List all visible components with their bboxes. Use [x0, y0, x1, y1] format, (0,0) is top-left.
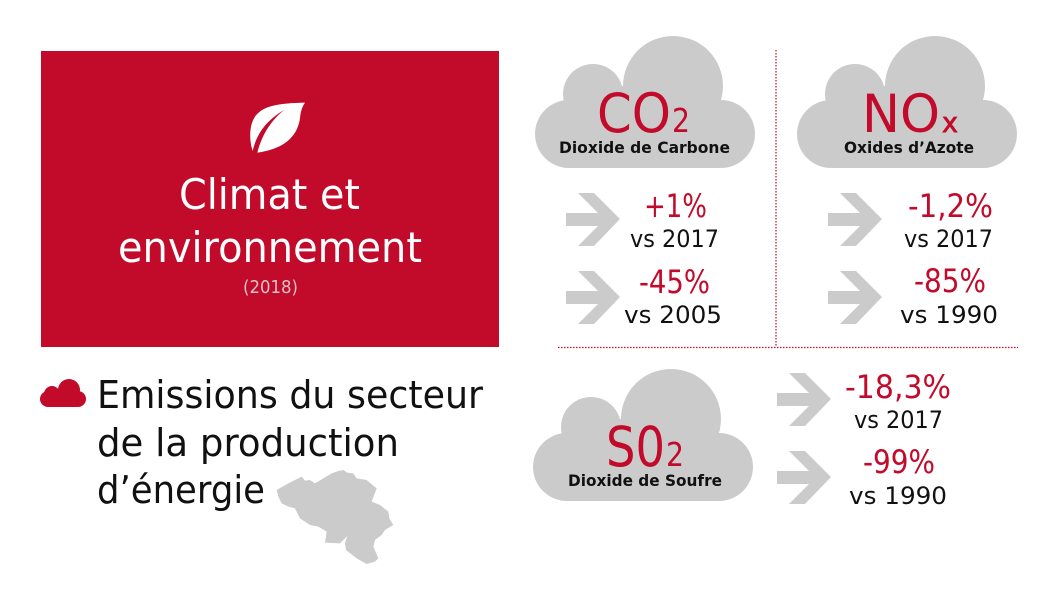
value: -99% vs 1990: -99%	[863, 443, 935, 481]
label: S02: S0	[606, 415, 665, 479]
title: Climat et	[179, 170, 360, 219]
value: -18,3% vs 2017: vs 2017	[854, 406, 943, 434]
title: environnement	[118, 223, 422, 272]
arrow	[566, 271, 620, 324]
label: NOx: NO	[862, 84, 940, 145]
value: -45% vs 2005: vs 2005	[624, 301, 722, 329]
icon: leaf	[250, 103, 305, 153]
panel: NOx	[797, 36, 1017, 329]
panel: NOx: x	[942, 106, 958, 139]
panel: title block	[41, 51, 499, 347]
subtitle: Emissions du secteur	[97, 373, 483, 417]
arrow	[777, 373, 831, 426]
value: -1,2% vs 2017	[904, 187, 993, 253]
value: -1,2% vs 2017: -1,2%	[908, 187, 993, 225]
panel: SO2	[533, 368, 951, 510]
value: -99% vs 1990	[849, 443, 947, 510]
year: (2018)	[243, 277, 298, 298]
label: Oxides d'Azote: Oxides d’Azote	[844, 138, 974, 157]
subtitle	[97, 373, 483, 512]
label: Dioxide de Carbone: Dioxide de Carbone	[559, 138, 730, 157]
arrow	[777, 451, 831, 504]
map: Belgium	[277, 470, 393, 564]
panel: SO2: 2	[666, 435, 684, 474]
value: -18,3% vs 2017	[845, 368, 951, 434]
value: +1% vs 2017: +1%	[644, 187, 707, 225]
subtitle: de la production	[97, 421, 399, 465]
cloud: NOx	[797, 36, 1017, 168]
value: +1% vs 2017: vs 2017	[630, 225, 719, 253]
label: CO2: CO	[597, 82, 671, 145]
value: -1,2% vs 2017: vs 2017	[904, 225, 993, 253]
label: Dioxide de Soufre: Dioxide de Soufre	[568, 471, 722, 490]
value: -85% vs 1990: -85%	[914, 262, 986, 300]
value: +1% vs 2017	[630, 187, 719, 253]
value: -99% vs 1990: vs 1990	[849, 482, 947, 510]
value: -45% vs 2005: -45%	[639, 263, 710, 301]
divider: vertical dotted	[775, 50, 777, 347]
value: -85% vs 1990: vs 1990	[900, 301, 998, 329]
cloud: CO2	[535, 36, 755, 168]
arrow	[828, 193, 882, 246]
divider: horizontal dotted	[558, 346, 1018, 348]
icon: small red cloud	[40, 379, 86, 407]
panel: CO2: 2	[672, 101, 690, 140]
panel: CO2	[535, 36, 755, 329]
title	[118, 170, 422, 272]
value: -45% vs 2005	[624, 263, 722, 329]
arrow	[566, 193, 620, 246]
value: -18,3% vs 2017: -18,3%	[845, 368, 951, 406]
subtitle: d’énergie	[97, 468, 265, 512]
arrow	[828, 271, 882, 324]
cloud: SO2	[533, 369, 753, 501]
value: -85% vs 1990	[900, 262, 998, 329]
